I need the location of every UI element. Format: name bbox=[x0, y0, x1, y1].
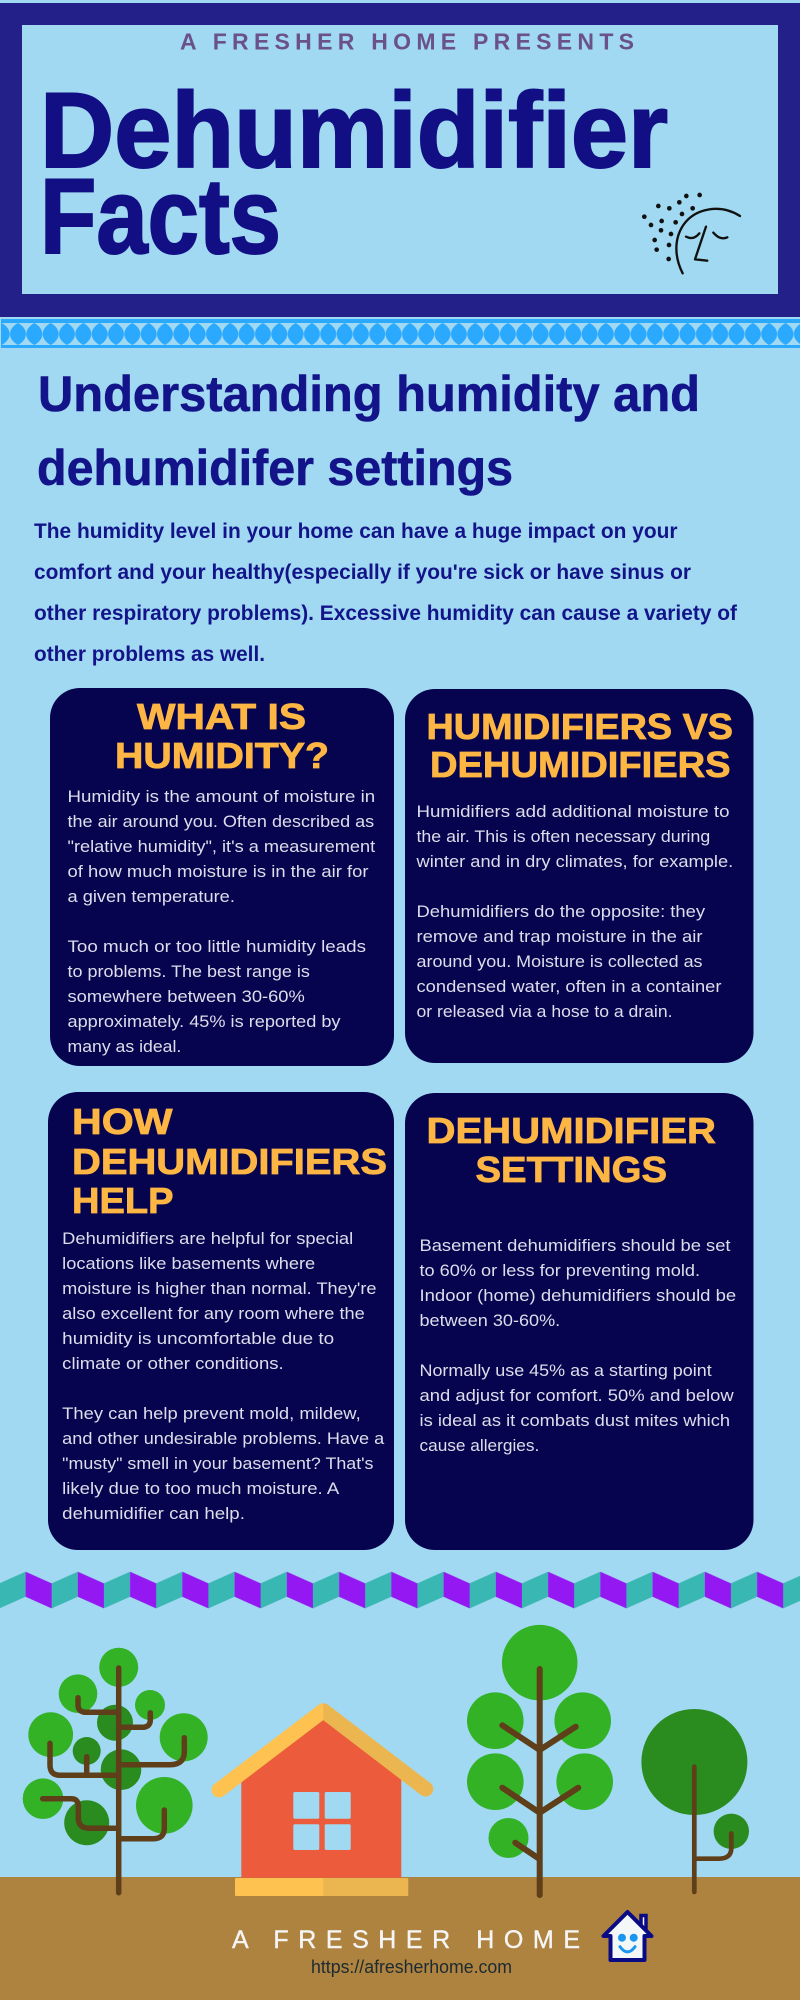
tree: left branching bbox=[23, 1648, 208, 1893]
text: what is humidity: Humidity is the amount of moisture in bbox=[68, 788, 375, 806]
heading: humidifiers vs dehumidifiers: DEHUMIDIFIERS bbox=[430, 744, 731, 785]
text: how dehumidifiers help: also excellent for any room where the bbox=[62, 1305, 365, 1323]
text: humidifiers vs dehumidifiers: around you. Moisture is collected as bbox=[416, 953, 702, 971]
text: dehumidifier settings: Basement dehumidifiers should be set bbox=[420, 1237, 731, 1255]
intro paragraph: other respiratory problems). Excessive humidity can cause a variety of bbox=[34, 602, 738, 625]
intro paragraph: The humidity level in your home can have a huge impact on your bbox=[34, 520, 678, 543]
heading: dehumidifier settings: DEHUMIDIFIER bbox=[426, 1110, 716, 1151]
ground bbox=[0, 1877, 800, 2000]
heading: what is humidity bbox=[115, 696, 329, 776]
text: how dehumidifiers help: humidity is uncomfortable due to bbox=[62, 1330, 334, 1348]
text: what is humidity: approximately. 45% is reported by bbox=[68, 1013, 341, 1031]
intro paragraph bbox=[34, 520, 738, 666]
text: how dehumidifiers help: They can help prevent mold, mildew, bbox=[62, 1405, 361, 1423]
section heading bbox=[37, 366, 700, 496]
text: how dehumidifiers help: and other undesirable problems. Have a bbox=[62, 1430, 385, 1448]
panel: what is humidity bbox=[50, 688, 394, 1066]
text: what is humidity: Too much or too little humidity leads bbox=[68, 938, 366, 956]
icon: smiling house logo bbox=[604, 1912, 652, 1960]
section heading: dehumidifer settings bbox=[37, 440, 513, 496]
main title: Dehumidifier bbox=[40, 70, 668, 190]
text: what is humidity: of how much moisture is in the air for bbox=[68, 863, 369, 881]
header panel bbox=[0, 3, 800, 317]
text: how dehumidifiers help: Dehumidifiers are helpful for special bbox=[62, 1230, 353, 1248]
text: how dehumidifiers help: "musty" smell in your basement? That's bbox=[62, 1455, 373, 1473]
text: humidifiers vs dehumidifiers: remove and trap moisture in the air bbox=[416, 928, 703, 946]
text: humidifiers vs dehumidifiers: winter and in dry climates, for example. bbox=[415, 853, 733, 871]
text: dehumidifier settings: is ideal as it combats dust mites which bbox=[420, 1412, 730, 1430]
heading: what is humidity: HUMIDITY? bbox=[115, 735, 329, 776]
patterned band bbox=[1, 319, 800, 348]
intro paragraph: other problems as well. bbox=[34, 643, 265, 666]
panel: dehumidifier settings bbox=[405, 1093, 754, 1550]
text: humidifiers vs dehumidifiers: the air. This is often necessary during bbox=[416, 828, 710, 846]
text: dehumidifier settings: Normally use 45% as a starting point bbox=[420, 1362, 712, 1380]
text: how dehumidifiers help bbox=[62, 1230, 385, 1523]
heading: dehumidifier settings: SETTINGS bbox=[476, 1149, 667, 1190]
text: humidifiers vs dehumidifiers bbox=[415, 803, 733, 1021]
footer url: https://afresherhome.com bbox=[311, 1957, 512, 1977]
text: what is humidity: the air around you. Often described as bbox=[68, 813, 374, 831]
heading: humidifiers vs dehumidifiers: HUMIDIFIERS VS bbox=[426, 706, 733, 747]
text: how dehumidifiers help: moisture is higher than normal. They're bbox=[62, 1280, 376, 1298]
text: what is humidity: many as ideal. bbox=[68, 1038, 181, 1056]
heading: how dehumidifiers help: DEHUMIDIFIERS bbox=[72, 1141, 387, 1182]
text: dehumidifier settings: between 30-60%. bbox=[420, 1312, 560, 1330]
main title: Facts bbox=[40, 156, 281, 276]
presents line: A FRESHER HOME PRESENTS bbox=[180, 28, 634, 54]
text: what is humidity: a given temperature. bbox=[68, 888, 235, 906]
panel: humidifiers vs dehumidifiers bbox=[405, 689, 754, 1063]
text: what is humidity: to problems. The best range is bbox=[68, 963, 310, 981]
text: dehumidifier settings: Indoor (home) dehumidifiers should be bbox=[420, 1287, 736, 1305]
heading: dehumidifier settings bbox=[426, 1110, 716, 1190]
text: dehumidifier settings: cause allergies. bbox=[420, 1437, 539, 1455]
house bbox=[219, 1711, 426, 1896]
heading: humidifiers vs dehumidifiers bbox=[426, 706, 733, 785]
text: dehumidifier settings: to 60% or less for preventing mold. bbox=[420, 1262, 700, 1280]
text: humidifiers vs dehumidifiers: or released via a hose to a drain. bbox=[416, 1003, 672, 1021]
text: dehumidifier settings bbox=[420, 1237, 736, 1455]
text: dehumidifier settings: and adjust for comfort. 50% and below bbox=[420, 1387, 734, 1405]
text: how dehumidifiers help: locations like basements where bbox=[62, 1255, 315, 1273]
panel: how dehumidifiers help bbox=[48, 1092, 394, 1550]
main title bbox=[40, 70, 668, 276]
text: what is humidity: somewhere between 30-60% bbox=[68, 988, 305, 1006]
zigzag band bbox=[0, 1572, 800, 1608]
icon: face with dots bbox=[642, 193, 740, 273]
tree: far right bbox=[641, 1709, 749, 1892]
text: how dehumidifiers help: dehumidifier can help. bbox=[62, 1505, 245, 1523]
heading: how dehumidifiers help: HOW bbox=[72, 1101, 173, 1142]
tree: middle right bbox=[467, 1625, 613, 1895]
heading: how dehumidifiers help: HELP bbox=[72, 1180, 174, 1221]
footer brand name: A FRESHER HOME bbox=[232, 1926, 580, 1954]
intro paragraph: comfort and your healthy(especially if you're sick or have sinus or bbox=[34, 561, 691, 584]
heading: how dehumidifiers help bbox=[72, 1101, 387, 1221]
text: humidifiers vs dehumidifiers: Humidifiers add additional moisture to bbox=[416, 803, 730, 821]
text: how dehumidifiers help: likely due to too much moisture. A bbox=[62, 1480, 339, 1498]
text: humidifiers vs dehumidifiers: condensed water, often in a container bbox=[416, 978, 722, 996]
text: humidifiers vs dehumidifiers: Dehumidifiers do the opposite: they bbox=[416, 903, 706, 921]
section heading: Understanding humidity and bbox=[38, 366, 700, 422]
text: what is humidity bbox=[68, 788, 376, 1056]
heading: what is humidity: WHAT IS bbox=[137, 696, 306, 737]
text: how dehumidifiers help: climate or other conditions. bbox=[62, 1355, 284, 1373]
text: what is humidity: "relative humidity", it's a measurement bbox=[68, 838, 376, 856]
